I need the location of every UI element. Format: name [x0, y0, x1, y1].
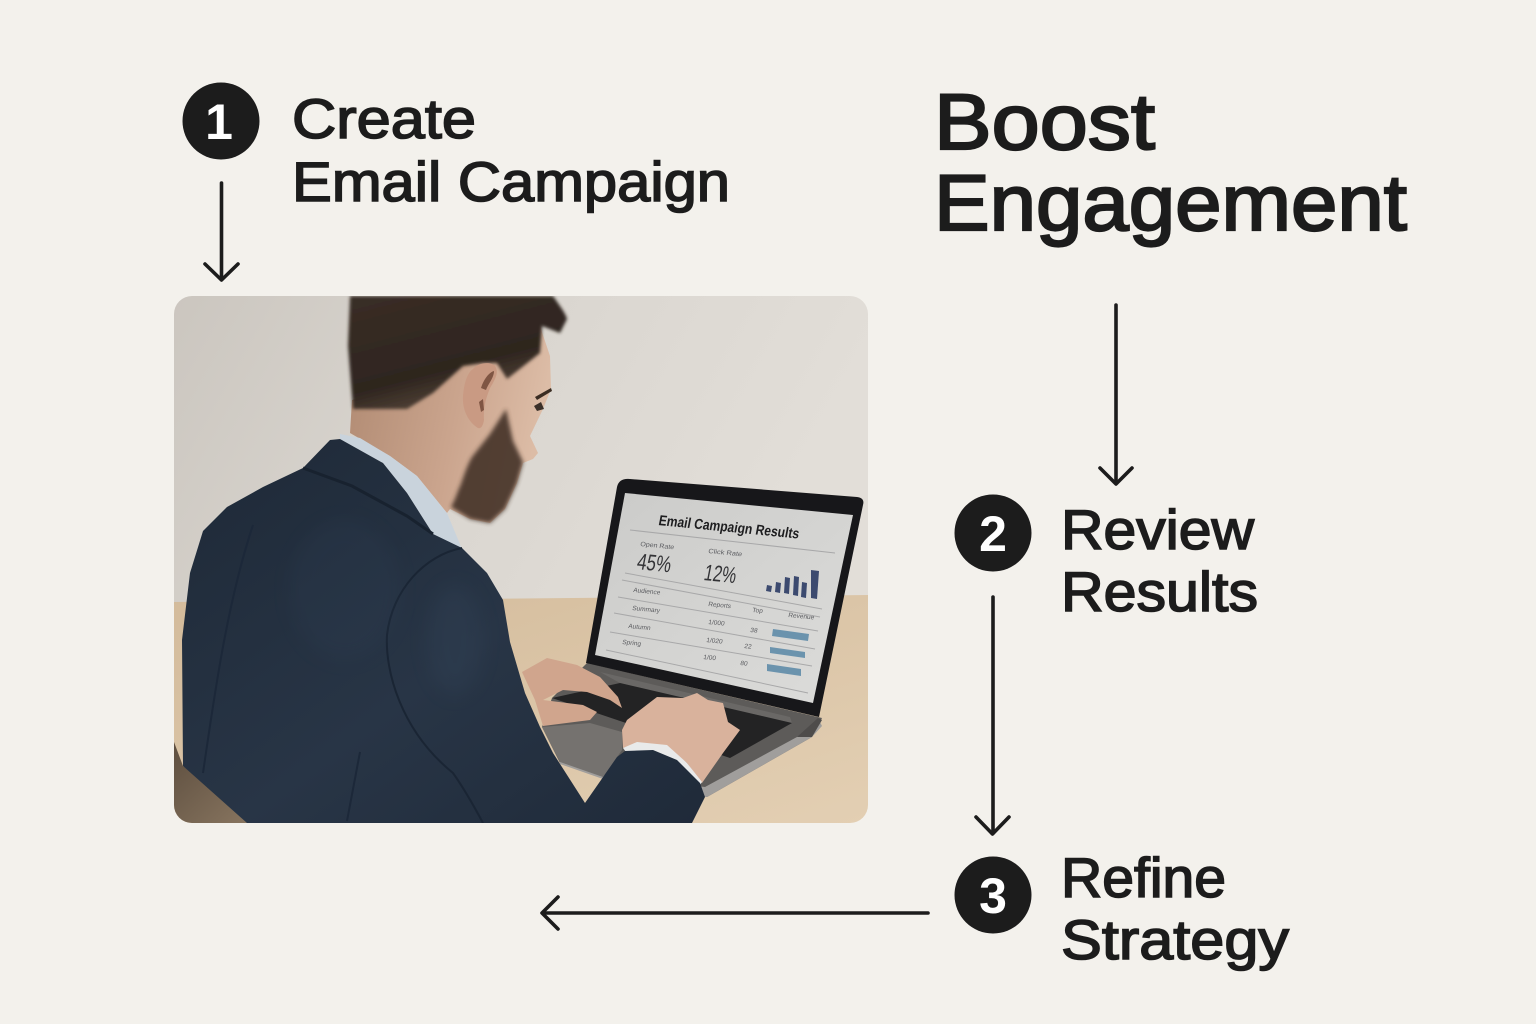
step 3: label: Strategy: [1061, 908, 1289, 971]
step 3: badge: [954, 856, 1032, 934]
step 1: label: Create: [292, 87, 476, 150]
infographic canvas: [174, 82, 1408, 972]
step 3: label: Refine: [1061, 846, 1226, 909]
ear: [463, 363, 497, 428]
bar chart: [766, 570, 819, 599]
step 1: label: [292, 87, 730, 213]
shirt collar: [340, 434, 462, 549]
right hand: [622, 693, 740, 783]
results table: Summary: [632, 605, 661, 615]
arrow: step 3 left toward photo: [542, 897, 928, 929]
step 1: label: Email Campaign: [292, 150, 730, 213]
results table: [622, 587, 815, 676]
results table: Autumn: [628, 623, 652, 632]
results table: 1/020: [706, 637, 724, 646]
wall: [174, 296, 868, 606]
step 3: label: [1061, 846, 1289, 971]
metric: 45%: [637, 542, 674, 572]
hair: [348, 296, 567, 409]
title: [934, 77, 1407, 247]
step 1: badge: [182, 82, 260, 160]
metric: 12%: [704, 548, 742, 583]
left hand: [522, 658, 622, 726]
results table: Top: [752, 607, 764, 615]
step 3: badge: 3: [979, 868, 1007, 924]
jacket: [182, 439, 705, 823]
metric: 12%: Click Rate: [708, 548, 743, 558]
jacket shading: [203, 468, 483, 823]
eye and brow: [534, 388, 552, 411]
results table: 38: [750, 627, 759, 635]
desk: [174, 595, 868, 823]
neck and face: [350, 326, 551, 523]
results table: 80: [740, 660, 749, 668]
results table: Reports: [708, 601, 732, 610]
screen rules: [606, 530, 835, 693]
step 1: badge: 1: [205, 94, 233, 150]
laptop base: [542, 663, 822, 797]
metric: 45%: 45%: [635, 548, 674, 577]
step 2: label: Review: [1061, 498, 1255, 561]
arrow: step 2 down to step 3: [976, 597, 1009, 834]
chair: [174, 742, 247, 823]
results table: Audience: [633, 587, 661, 597]
step 2: label: Results: [1061, 560, 1258, 623]
beard: [451, 409, 523, 523]
step 2: badge: 2: [979, 506, 1007, 562]
results table: 1/000: [708, 619, 726, 628]
title: Engagement: [934, 158, 1407, 247]
arrow: step 1 down to photo: [205, 183, 238, 280]
screen heading: Email Campaign Results: [657, 513, 801, 542]
results table: 1/00: [703, 654, 717, 662]
metric: 12%: 12%: [702, 559, 739, 588]
arrow: title down to step 2: [1100, 305, 1132, 484]
title: Boost: [934, 77, 1155, 166]
shirt cuff: [623, 742, 702, 785]
metric: 45%: Open Rate: [640, 541, 675, 551]
step 2: label: [1061, 498, 1258, 623]
laptop screen: [586, 479, 863, 717]
results table: Revenue: [788, 612, 815, 621]
results table: 22: [744, 643, 753, 651]
results table: Spring: [622, 639, 642, 648]
step 2: badge: [954, 494, 1032, 572]
photo: man reviewing campaign results on a laptop: [174, 296, 868, 823]
